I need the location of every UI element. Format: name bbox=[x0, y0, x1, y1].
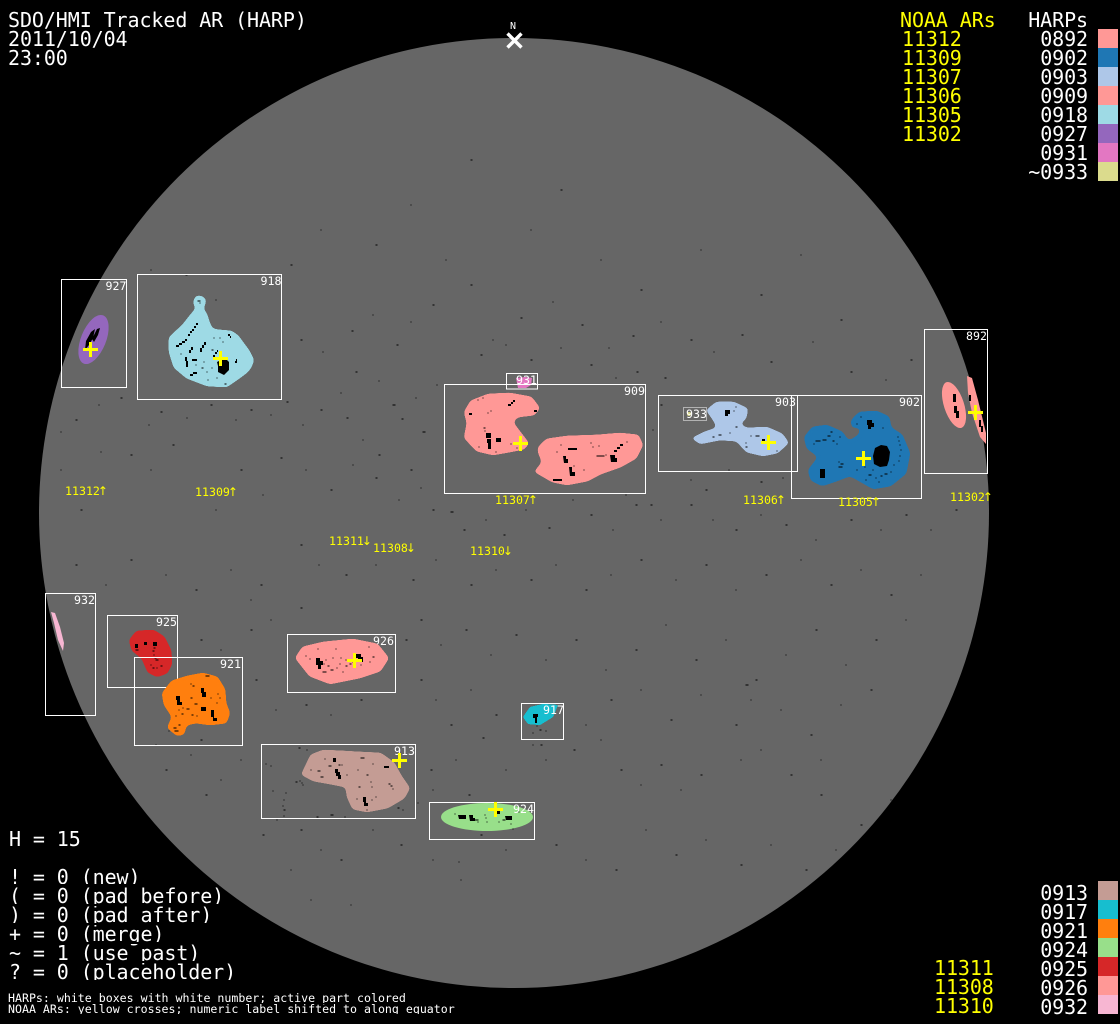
region: HARP 932 bbox=[46, 593, 96, 716]
table: HARPs top with colour swatches: ~0933 bbox=[1028, 160, 1088, 184]
region: HARP 931: 931 bbox=[516, 373, 537, 387]
status legend: ( = 0 (pad before) bbox=[9, 884, 224, 908]
title: 2011/10/04 bbox=[8, 27, 128, 51]
table: NOAA ARs top bbox=[900, 8, 996, 146]
region: HARP 926: 926 bbox=[373, 634, 394, 648]
region: HARP 917: 917 bbox=[543, 703, 564, 717]
background magnetogram specks bbox=[60, 160, 958, 905]
table: HARPs top with colour swatches: 0918 bbox=[1040, 103, 1088, 127]
region: HARP 918 bbox=[138, 274, 282, 400]
table: HARPs bottom with colour swatches: 0932 bbox=[1040, 995, 1088, 1019]
table: NOAA ARs top: NOAA ARs bbox=[900, 8, 996, 32]
region: HARP 924 bbox=[430, 802, 534, 840]
region: HARP 931 bbox=[506, 373, 538, 389]
table: HARPs top with colour swatches: 0903 bbox=[1040, 65, 1088, 89]
table: HARPs top with colour swatches: 0927 bbox=[1040, 122, 1088, 146]
table: NOAA ARs top: 11302 bbox=[902, 122, 962, 146]
explanatory notes: HARPs: white boxes with white number; active part colored bbox=[8, 991, 406, 1005]
region: HARP 932: 932 bbox=[74, 593, 95, 607]
region: HARP 927 bbox=[62, 279, 127, 388]
region: HARP 903: 903 bbox=[775, 395, 796, 409]
status legend: + = 0 (merge) bbox=[9, 922, 164, 946]
status legend bbox=[9, 865, 236, 984]
region: HARP 918: 918 bbox=[261, 274, 282, 288]
table: HARPs bottom with colour swatches: 0926 bbox=[1040, 976, 1088, 1000]
table: HARPs top with colour swatches: 0909 bbox=[1040, 84, 1088, 108]
NOAA AR labels along equator: 11307↑ bbox=[495, 493, 538, 507]
table: HARPs bottom with colour swatches: 0924 bbox=[1040, 938, 1088, 962]
region: HARP 917 bbox=[522, 703, 564, 740]
title: SDO/HMI Tracked AR (HARP) bbox=[8, 8, 307, 32]
status legend: ~ = 1 (use past) bbox=[9, 941, 200, 965]
status legend: ! = 0 (new) bbox=[9, 865, 140, 889]
NOAA AR labels along equator: 11305↑ bbox=[838, 495, 881, 509]
table: NOAA ARs top: 11305 bbox=[902, 103, 962, 127]
table: HARPs bottom with colour swatches: 0913 bbox=[1040, 881, 1088, 905]
NOAA AR labels along equator bbox=[65, 484, 993, 558]
table: NOAA ARs top: 11309 bbox=[902, 46, 962, 70]
status legend: ? = 0 (placeholder) bbox=[9, 960, 236, 984]
status legend: ) = 0 (pad after) bbox=[9, 903, 212, 927]
region: HARP 924: 924 bbox=[513, 802, 534, 816]
table: HARPs bottom with colour swatches bbox=[1040, 881, 1118, 1019]
count H: H = 15 bbox=[9, 827, 81, 851]
region: HARP 926 bbox=[288, 634, 396, 692]
table: HARPs top with colour swatches: 0931 bbox=[1040, 141, 1088, 165]
region: HARP 925 bbox=[108, 615, 178, 688]
region: HARP 925: 925 bbox=[156, 615, 177, 629]
table: NOAA ARs top: 11306 bbox=[902, 84, 962, 108]
region: HARP 902: 902 bbox=[899, 395, 920, 409]
NOAA AR labels along equator: 11302↑ bbox=[950, 490, 993, 504]
region: HARP 921: 921 bbox=[220, 657, 241, 671]
NOAA AR labels along equator: 11310↓ bbox=[470, 544, 513, 558]
table: NOAA ARs bottom: 11308 bbox=[934, 975, 994, 999]
region: HARP 903 bbox=[658, 395, 798, 472]
NOAA AR labels along equator: 11308↓ bbox=[373, 541, 416, 555]
NOAA AR labels along equator: 11312↑ bbox=[65, 484, 108, 498]
table: HARPs top with colour swatches: 0902 bbox=[1040, 46, 1088, 70]
table: HARPs top with colour swatches: 0892 bbox=[1040, 27, 1088, 51]
region: HARP 909: 909 bbox=[624, 384, 645, 398]
region: HARP 913: 913 bbox=[394, 744, 415, 758]
north pole marker: N bbox=[510, 21, 516, 32]
explanatory notes: NOAA ARs: yellow crosses; numeric label shifted to along equator bbox=[8, 1002, 455, 1016]
region: HARP 913 bbox=[262, 744, 418, 818]
north pole marker bbox=[508, 21, 522, 48]
table: NOAA ARs bottom: 11311 bbox=[934, 956, 994, 980]
table: HARPs top with colour swatches: HARPs bbox=[1028, 8, 1088, 32]
region: HARP 927: 927 bbox=[106, 279, 127, 293]
explanatory notes bbox=[8, 993, 454, 1014]
region: HARP 921 bbox=[134, 657, 242, 746]
region: HARP 892: 892 bbox=[966, 329, 987, 343]
table: HARPs top with colour swatches bbox=[1028, 8, 1118, 184]
NOAA AR labels along equator: 11309↑ bbox=[195, 485, 238, 499]
table: HARPs bottom with colour swatches: 0921 bbox=[1040, 919, 1088, 943]
table: HARPs bottom with colour swatches: 0917 bbox=[1040, 900, 1088, 924]
table: HARPs bottom with colour swatches: 0925 bbox=[1040, 957, 1088, 981]
NOAA AR labels along equator: 11311↓ bbox=[329, 534, 372, 548]
region: HARP 902 bbox=[792, 395, 922, 498]
table: NOAA ARs top: 11307 bbox=[902, 65, 962, 89]
table: NOAA ARs top: 11312 bbox=[902, 27, 962, 51]
sun disc bbox=[39, 38, 989, 988]
NOAA AR labels along equator: 11306↑ bbox=[743, 493, 786, 507]
title: 23:00 bbox=[8, 46, 68, 70]
table: NOAA ARs bottom: 11310 bbox=[934, 994, 994, 1018]
region: HARP 909 bbox=[444, 384, 646, 494]
table: NOAA ARs bottom bbox=[934, 956, 994, 1018]
region: HARP 892 bbox=[924, 329, 988, 474]
title bbox=[8, 8, 307, 70]
region: HARP 933: 933 bbox=[686, 407, 707, 421]
